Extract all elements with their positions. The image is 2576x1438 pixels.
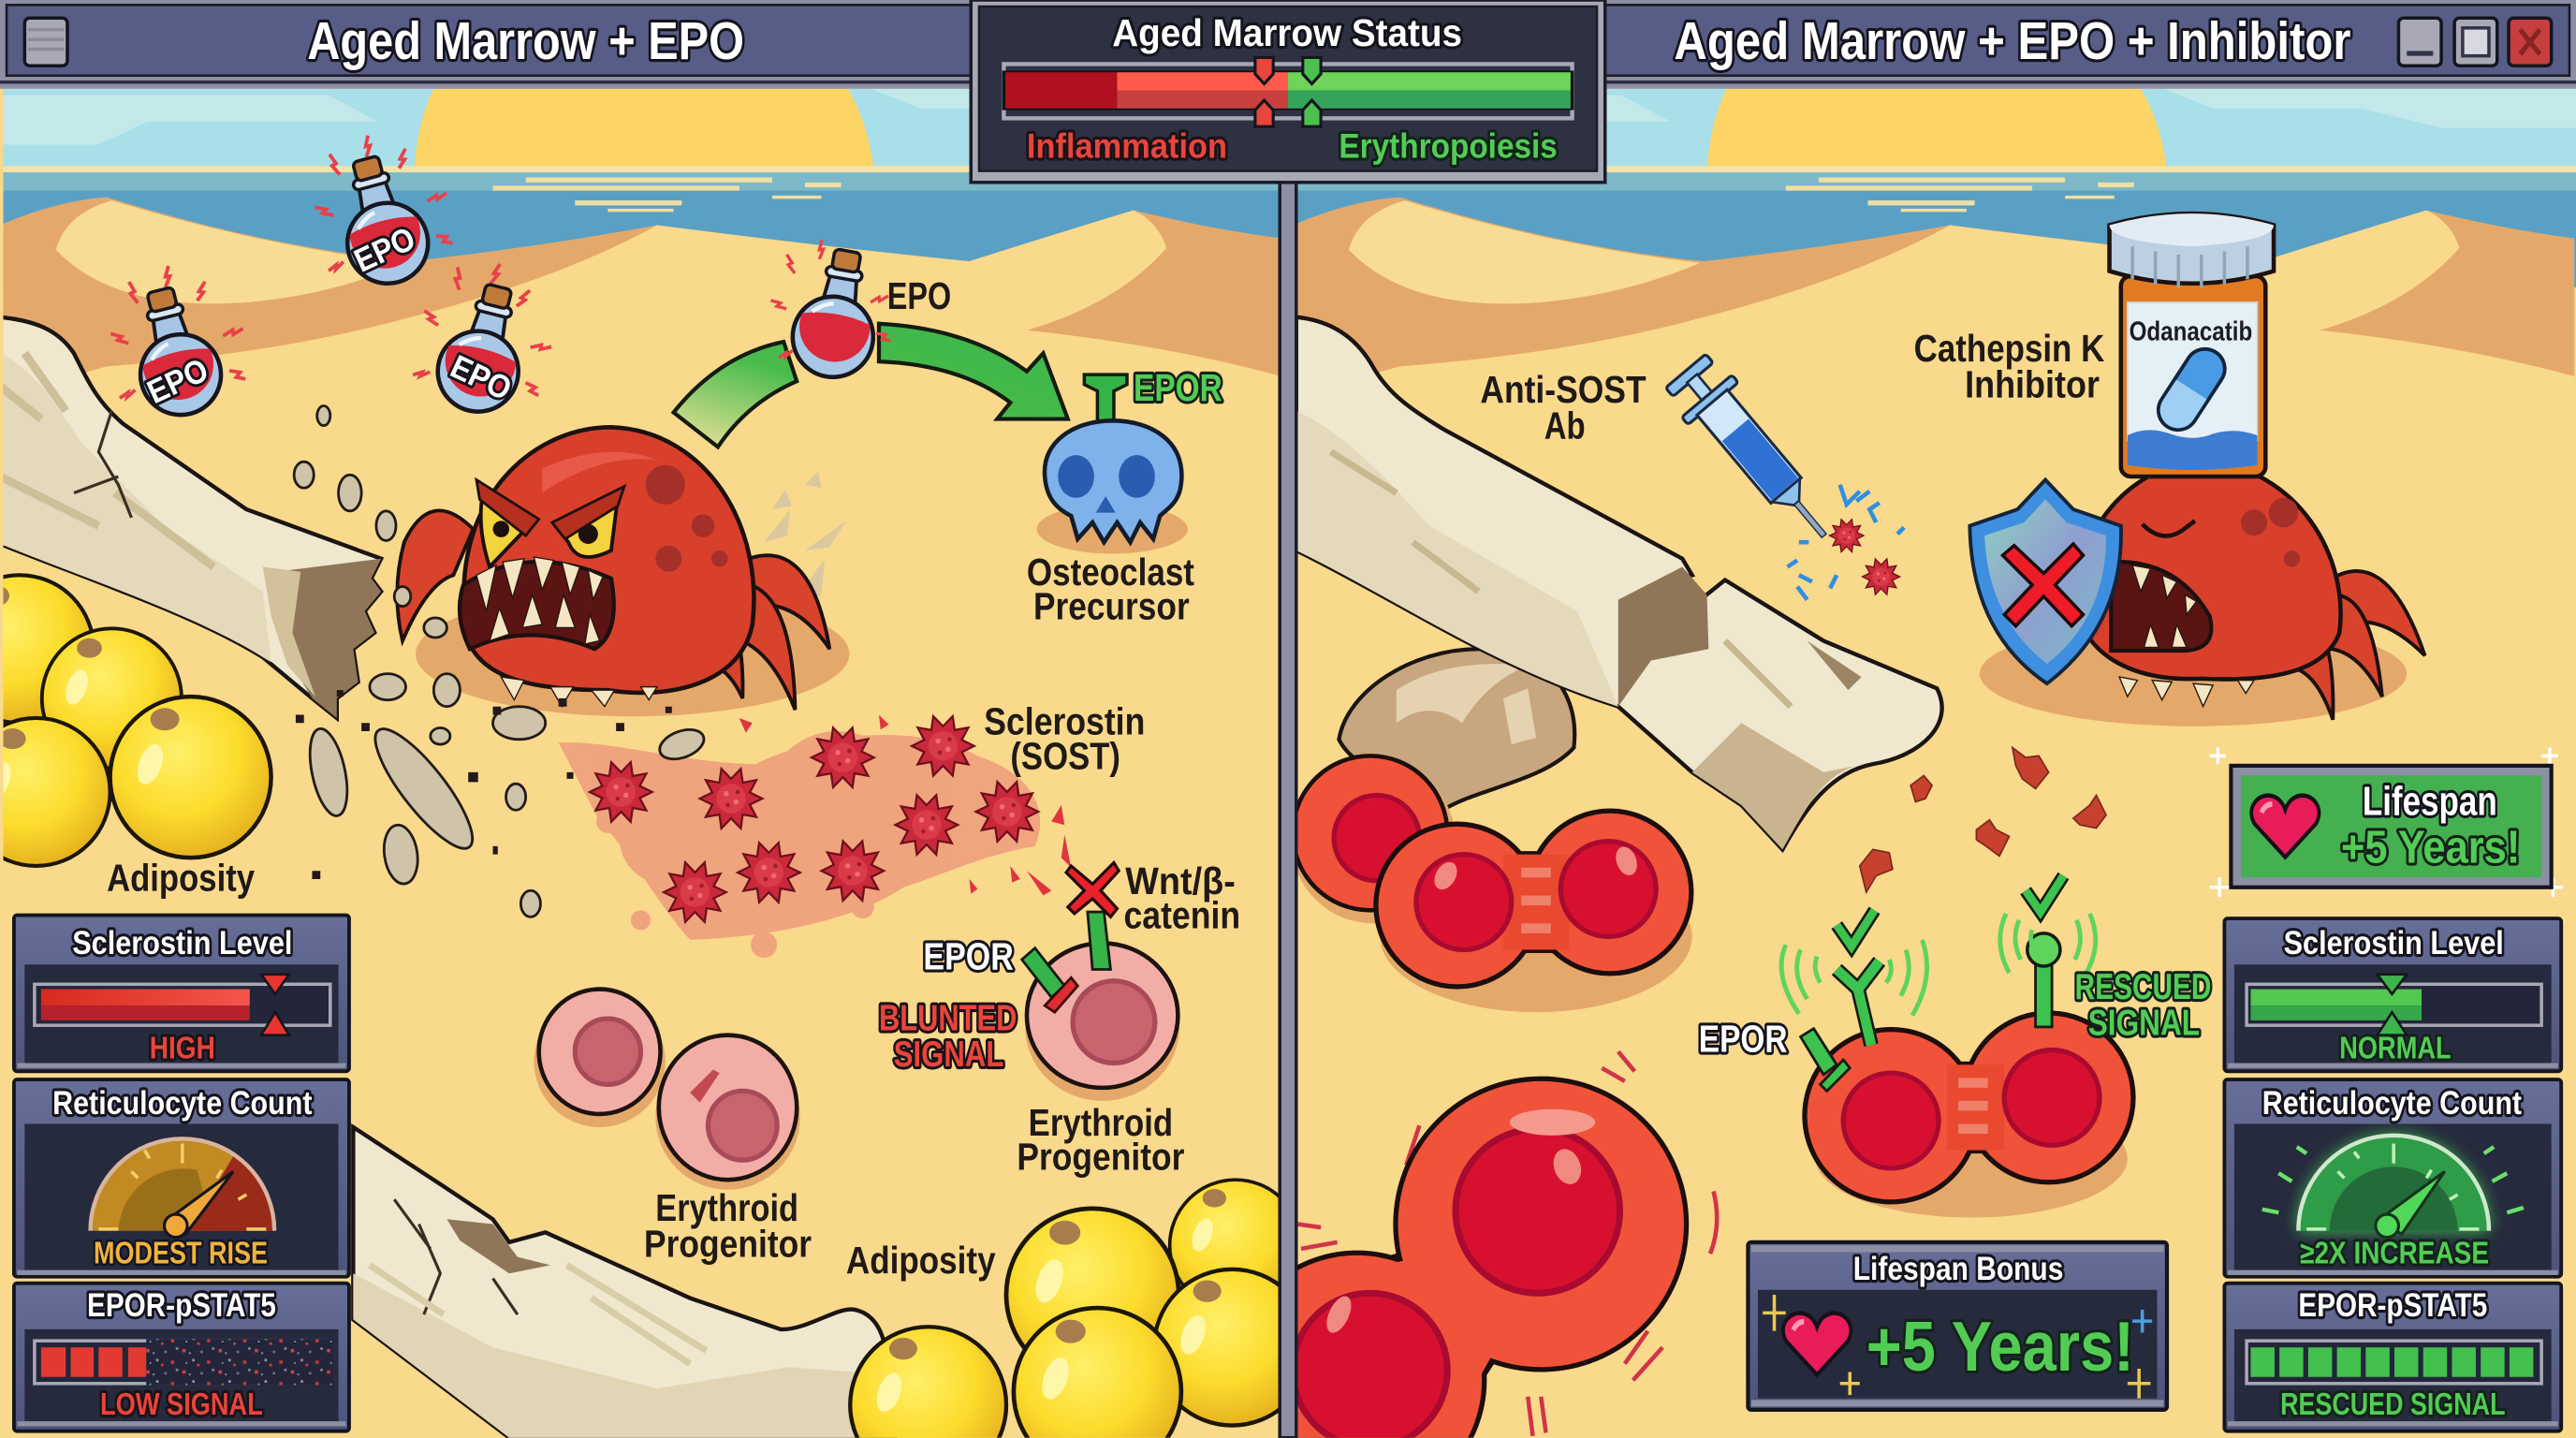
label: Adiposity left: Adiposity: [107, 856, 256, 899]
label: EPO: EPO: [887, 274, 951, 317]
icon: shield with red X: [1969, 479, 2121, 683]
icon: upper femur bone, crumbling: [0, 317, 381, 718]
label: Odanacatib: Odanacatib: [2130, 316, 2252, 346]
title: Aged Marrow + EPO: Aged Marrow + EPO: [307, 11, 744, 70]
label: Cathepsin K Inhibitor: Inhibitor: [1965, 363, 2100, 406]
panel: right scene "Aged Marrow + EPO + Inhibitor": [1227, 89, 2576, 1438]
label: Anti-SOST Ab: Ab: [1544, 404, 1586, 448]
icon: Odanacatib bottle: [2110, 213, 2274, 477]
icon: healthy-looking erythroid progenitors: [534, 990, 800, 1190]
panel: right Sclerostin Level: NORMAL: [2339, 1031, 2452, 1065]
icon: sclerostin particles: [590, 714, 1071, 922]
label: Osteoclast Precursor: Osteoclast: [1027, 550, 1194, 594]
label: Anti-SOST Ab: [1480, 368, 1647, 448]
icon: red blood cell, rear left: [1292, 756, 1456, 923]
icon: red X blocking Wnt: [1066, 862, 1119, 917]
panel: left EPOR-pSTAT5: EPOR-pSTAT5: [87, 1287, 276, 1324]
title: Aged Marrow Status: Aged Marrow Status: [1112, 11, 1462, 54]
icon: lower femur bone: [353, 1127, 896, 1438]
label: Erythroid Progenitor left: Progenitor: [644, 1223, 812, 1266]
label: Erythroid Progenitor right: Erythroid: [1029, 1101, 1173, 1144]
label: rescued signal: [2075, 967, 2211, 1044]
label: rescued signal: RESCUED: [2075, 967, 2211, 1007]
panel: lifespan bonus: [1748, 1242, 2167, 1410]
panel: lifespan bonus: Lifespan Bonus: [1853, 1251, 2063, 1287]
icon: crab fragments: [1860, 748, 2106, 892]
panel: left EPOR-pSTAT5: [14, 1284, 349, 1431]
icon: repairing femur bone: [1296, 317, 1942, 849]
divider between scenes: [1280, 172, 1296, 1438]
panel: right EPOR-pSTAT5: RESCUED SIGNAL: [2280, 1387, 2506, 1422]
panel: aged marrow status: [971, 0, 1605, 183]
panel: left Reticulocyte Count: Reticulocyte Count: [52, 1085, 313, 1122]
label: blunted signal: [879, 998, 1017, 1075]
label: Inflammation: Inflammation: [1027, 126, 1227, 165]
label: Erythroid Progenitor right: [1018, 1108, 1184, 1178]
panel: lifespan green badge: [2210, 748, 2563, 897]
icon: scattered potions: EPO: [445, 348, 517, 408]
label: Adiposity right: Adiposity: [846, 1239, 996, 1282]
label: Erythroid Progenitor left: [646, 1193, 811, 1265]
gauge: modest rise: [91, 1138, 274, 1238]
icon: red blood cell doublet: [1373, 809, 1694, 1012]
gauge: 2x increase: [2262, 1136, 2524, 1238]
arrow: green EPO arc to EPOR: [674, 324, 1068, 447]
icon: subdued osteoclast crab: [1980, 460, 2425, 726]
icon: sclerostin cloud: [559, 731, 1040, 958]
panel: lifespan green badge: Lifespan: [2363, 779, 2497, 825]
label: Osteoclast Precursor: Precursor: [1033, 585, 1190, 628]
icon: scattered potions: [110, 135, 552, 418]
label: EPOR right: EPOR: [1699, 1017, 1788, 1060]
icon: rescued red blood cell with receptors: [1781, 875, 2136, 1218]
decorative bits: faded debris behind crab: [764, 472, 846, 608]
icon: window buttons: [2398, 18, 2552, 66]
label: EPOR on skull: EPOR: [1134, 366, 1222, 409]
icon: main EPO potion: [770, 240, 891, 380]
icon: scattered potions: EPO: [141, 352, 213, 411]
panel: right Sclerostin Level: [2224, 918, 2561, 1071]
panel: left EPOR-pSTAT5: LOW SIGNAL: [100, 1387, 263, 1422]
label: Cathepsin K Inhibitor: [1914, 327, 2104, 406]
panel: left scene "Aged Marrow + EPO": [0, 89, 1314, 1438]
label: Anti-SOST Ab: Anti-SOST: [1480, 368, 1647, 411]
panel: left title bar: [0, 0, 973, 89]
label: Wnt/beta-catenin: catenin: [1123, 894, 1240, 937]
title: Aged Marrow + EPO + Inhibitor: Aged Marrow + EPO + Inhibitor: [1674, 11, 2351, 70]
label: Erythroid Progenitor right: Progenitor: [1017, 1136, 1185, 1179]
label: EPOR left: EPOR: [923, 935, 1014, 978]
status bar: [1003, 57, 1573, 126]
panel: lifespan bonus: +5 Years!: [1866, 1307, 2134, 1386]
icon: bone debris: [294, 406, 708, 917]
label: Cathepsin K Inhibitor: Cathepsin K: [1914, 327, 2104, 370]
label: Wnt/beta-catenin: [1125, 867, 1238, 929]
icon: angry osteoclast crab: [397, 427, 849, 716]
panel: right Sclerostin Level: Sclerostin Level: [2284, 925, 2504, 961]
panel: left Sclerostin Level: [14, 916, 349, 1071]
icon: erythroid progenitor with blunted EPOR: [1022, 912, 1179, 1101]
panel: right Reticulocyte Count: Reticulocyte Count: [2262, 1085, 2522, 1122]
icon: bone fragment rock: [1339, 649, 1574, 809]
label: Sclerostin (SOST): [985, 707, 1144, 777]
panel: lifespan green badge: +5 Years!: [2341, 822, 2520, 873]
label: Osteoclast Precursor: [1028, 558, 1194, 620]
label: Wnt/beta-catenin: Wnt/β-: [1125, 859, 1236, 902]
panel: left Sclerostin Level: Sclerostin Level: [72, 925, 292, 961]
icon: adipocytes, lower right cluster: [850, 1180, 1310, 1438]
panel: left Reticulocyte Count: MODEST RISE: [94, 1237, 268, 1271]
icon: menu button: [24, 18, 67, 66]
label: blunted signal: SIGNAL: [894, 1034, 1003, 1075]
panel: left Sclerostin Level: HIGH: [150, 1031, 215, 1065]
panel: right title bar: [1603, 0, 2576, 89]
icon: anti-SOST syringe: [1661, 350, 1904, 600]
panel: right EPOR-pSTAT5: [2224, 1284, 2561, 1431]
panel: left Reticulocyte Count: [14, 1079, 349, 1277]
icon: adipocytes, left cluster: [0, 575, 271, 866]
icon: osteoclast precursor skull: [1036, 374, 1188, 553]
label: Erythropoiesis: Erythropoiesis: [1339, 126, 1558, 165]
label: Sclerostin (SOST): (SOST): [1010, 734, 1120, 777]
label: Erythroid Progenitor left: Erythroid: [655, 1186, 798, 1229]
panel: right EPOR-pSTAT5: EPOR-pSTAT5: [2298, 1287, 2487, 1324]
panel: right Reticulocyte Count: ≥2X INCREASE: [2300, 1237, 2489, 1271]
label: Sclerostin (SOST): Sclerostin: [984, 700, 1145, 743]
label: blunted signal: BLUNTED: [879, 998, 1017, 1038]
icon: large red blood cell doublet: [1297, 1050, 1719, 1438]
panel: right Reticulocyte Count: [2224, 1079, 2561, 1277]
icon: scattered potions: EPO: [349, 220, 421, 280]
label: rescued signal: SIGNAL: [2088, 1004, 2200, 1044]
